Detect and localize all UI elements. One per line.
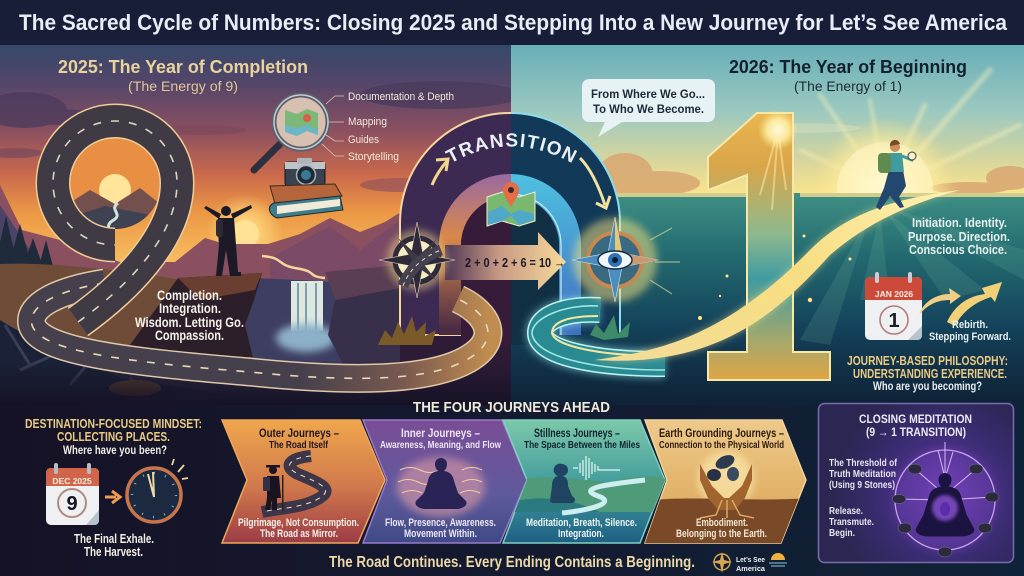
- ground rays: [800, 208, 1024, 345]
- big arrow with sum: 2 + 0 + 2 + 6 = 10 →: [465, 256, 565, 270]
- title: [0, 0, 1024, 45]
- icon: map with pin: [487, 182, 535, 226]
- valley: [245, 278, 342, 364]
- panel: earth grounding journeys: Earth Grounding Journeys –: [659, 426, 784, 440]
- panel: outer journeys: Pilgrimage, Not Consumption.: [238, 517, 359, 529]
- cliff: [130, 273, 262, 380]
- heading: 2026: 2026: The Year of Beginning: [729, 57, 967, 77]
- icon: clock near midnight: [127, 459, 188, 522]
- panel: 2025 sunset scene: [0, 45, 520, 405]
- panel: outer journeys: [222, 420, 385, 543]
- sun behind hiker: [212, 197, 278, 244]
- glowing road into 2026: [532, 306, 665, 370]
- speech bubble: From Where We Go...: [591, 87, 705, 101]
- text: rebirth: Rebirth.: [952, 319, 988, 331]
- description: (Using 9 Stones): [829, 479, 895, 491]
- walker with compass: [876, 140, 916, 210]
- panel: inner journeys: Flow, Presence, Awareness.: [385, 517, 496, 529]
- bottom fade of left scene: [0, 360, 511, 405]
- panel: closing meditation: (9 → 1 TRANSITION): [866, 425, 966, 439]
- destination-focused mindset: COLLECTING PLACES.: [57, 430, 170, 444]
- panel: earth grounding journeys: Connection to the Physical World: [659, 440, 784, 451]
- label list: documentation: Documentation & Depth: [348, 91, 454, 103]
- icon: December calendar: [46, 463, 99, 525]
- icon: December calendar: 9: [66, 493, 78, 515]
- description: Release.: [829, 505, 863, 517]
- hiker with raised arms: [204, 205, 252, 276]
- right values text: Initiation. Identity.: [912, 215, 1007, 230]
- panel: outer journeys: The Road Itself: [269, 440, 329, 451]
- panel: outer journeys: Outer Journeys –: [259, 426, 339, 440]
- panel: earth grounding journeys: Belonging to the Earth.: [676, 528, 767, 540]
- icon: eye compass: [572, 217, 680, 302]
- destination-focused mindset: Where have you been?: [63, 445, 167, 457]
- sun rays: [798, 66, 1023, 165]
- icon: meditator: [415, 458, 467, 509]
- arrow: calendar to clock: [105, 491, 120, 503]
- panel: outer journeys: The Road as Mirror.: [260, 528, 338, 540]
- description: Begin.: [829, 527, 855, 539]
- icon: road compass: [379, 222, 455, 298]
- left values text: Completion.: [157, 288, 222, 303]
- destination-focused mindset: [25, 417, 202, 457]
- icon: January calendar: JAN 2026: [875, 289, 913, 299]
- transition text: [442, 146, 582, 169]
- description: The Threshold of: [829, 457, 897, 469]
- far mountains: [0, 185, 400, 280]
- text: rebirth: Stepping Forward.: [929, 331, 1011, 343]
- text: final exhale: The Final Exhale.: [74, 532, 154, 546]
- dark valley base: [55, 345, 400, 403]
- label list: documentation: [322, 91, 454, 163]
- journey-based philosophy: Who are you becoming?: [873, 381, 982, 393]
- left values text: Compassion.: [155, 328, 224, 343]
- footer tagline: The Road Continues. Every Ending Contains a Beginning.: [329, 554, 695, 571]
- panel: earth grounding journeys: [640, 420, 810, 550]
- label list: documentation: Guides: [348, 134, 379, 146]
- left values text: [135, 288, 244, 343]
- panel: stillness journeys: Stillness Journeys –: [534, 426, 620, 440]
- panel: closing meditation: [818, 404, 1014, 562]
- label list: documentation: Mapping: [348, 116, 387, 128]
- panel: stillness journeys: Meditation, Breath, Silence.: [526, 517, 637, 529]
- logo: Let's See America: America: [736, 564, 766, 573]
- ground: [0, 264, 177, 345]
- clouds: [0, 81, 520, 192]
- icon: magnifier over map: [254, 95, 328, 170]
- panel: inner journeys: Movement Within.: [404, 528, 477, 540]
- panel: inner journeys: [363, 420, 527, 543]
- right values text: [908, 215, 1010, 257]
- sea plain: [511, 193, 1024, 405]
- bush under arch: [378, 316, 436, 345]
- label list: documentation: Storytelling: [348, 151, 399, 163]
- left values text: Integration.: [159, 301, 221, 316]
- icon: hands with stones: [700, 452, 754, 518]
- waterfall: [276, 281, 336, 352]
- left half: [399, 112, 511, 336]
- transition arch: TRANSITION: [444, 133, 577, 163]
- heading: 2025: [58, 57, 308, 94]
- description: Transmute.: [829, 516, 874, 528]
- big number 1: [708, 110, 830, 380]
- pine trees: [0, 216, 53, 265]
- heading: four journeys: THE FOUR JOURNEYS AHEAD: [413, 399, 610, 416]
- icon: sound wave: [573, 456, 620, 480]
- panel: earth grounding journeys: Embodiment.: [696, 517, 748, 529]
- heading: 2026: (The Energy of 1): [794, 78, 902, 94]
- panel: closing meditation: CLOSING MEDITATION: [859, 412, 972, 426]
- meditating figure: [916, 473, 974, 536]
- glow: [397, 457, 485, 517]
- panel: inner journeys: Inner Journeys –: [401, 426, 480, 440]
- icon: road: [262, 456, 326, 512]
- text: final exhale: [74, 532, 154, 559]
- golden ribbon path: [595, 190, 960, 361]
- text: final exhale: The Harvest.: [84, 545, 143, 559]
- speech bubble: [582, 79, 715, 137]
- logo: Let's See America: [712, 552, 787, 573]
- road shaped as number 9: [53, 121, 177, 322]
- transition arch: [399, 112, 621, 345]
- icon: seated figure: [550, 464, 575, 503]
- panel: 2026 sunrise scene: [511, 45, 1024, 405]
- panel: stillness journeys: [500, 420, 670, 543]
- text: rebirth: [929, 319, 1011, 343]
- sun: [828, 122, 951, 193]
- energy ring: [893, 442, 997, 552]
- panel: stillness journeys: The Space Between the Miles: [524, 440, 640, 451]
- icon: January calendar: [865, 272, 922, 340]
- foreground foliage: [0, 320, 130, 383]
- panel: stillness journeys: Integration.: [558, 528, 604, 540]
- heading: 2025: (The Energy of 9): [128, 78, 238, 94]
- logo: Let's See America: Let’s See: [736, 555, 765, 564]
- scene inside ring: [70, 138, 160, 229]
- right values text: Purpose. Direction.: [908, 229, 1010, 244]
- heading: 2026: [729, 57, 967, 94]
- description: [829, 457, 897, 539]
- waves: [398, 468, 482, 493]
- river: [262, 256, 325, 278]
- arrow up left: [432, 159, 448, 185]
- destination-focused mindset: DESTINATION-FOCUSED MINDSET:: [25, 417, 202, 431]
- right half: [511, 112, 621, 345]
- icon: January calendar: 1: [888, 310, 900, 332]
- description: Truth Meditation: [829, 468, 896, 480]
- icon: December calendar: DEC 2025: [52, 476, 92, 486]
- plant near arch: [590, 315, 630, 340]
- heading: 2025: 2025: The Year of Completion: [58, 57, 308, 77]
- clouds: [602, 153, 1024, 193]
- big arrow with sum: [445, 232, 566, 290]
- panel: inner journeys: Awareness, Meaning, and Flow: [380, 440, 501, 451]
- nine stones: [892, 464, 999, 557]
- speech bubble: To Who We Become.: [593, 102, 704, 116]
- icon: pilgrim: [263, 465, 284, 511]
- right values text: Conscious Choice.: [909, 242, 1007, 257]
- lower winding road: [31, 283, 488, 378]
- arrows: stepping forward: [919, 282, 1002, 326]
- left values text: Wisdom. Letting Go.: [135, 315, 244, 330]
- arrow down right: [580, 158, 610, 208]
- journey-based philosophy: [847, 354, 1008, 393]
- icon: camera on books: [269, 158, 343, 218]
- shade inside road curve: [400, 336, 511, 375]
